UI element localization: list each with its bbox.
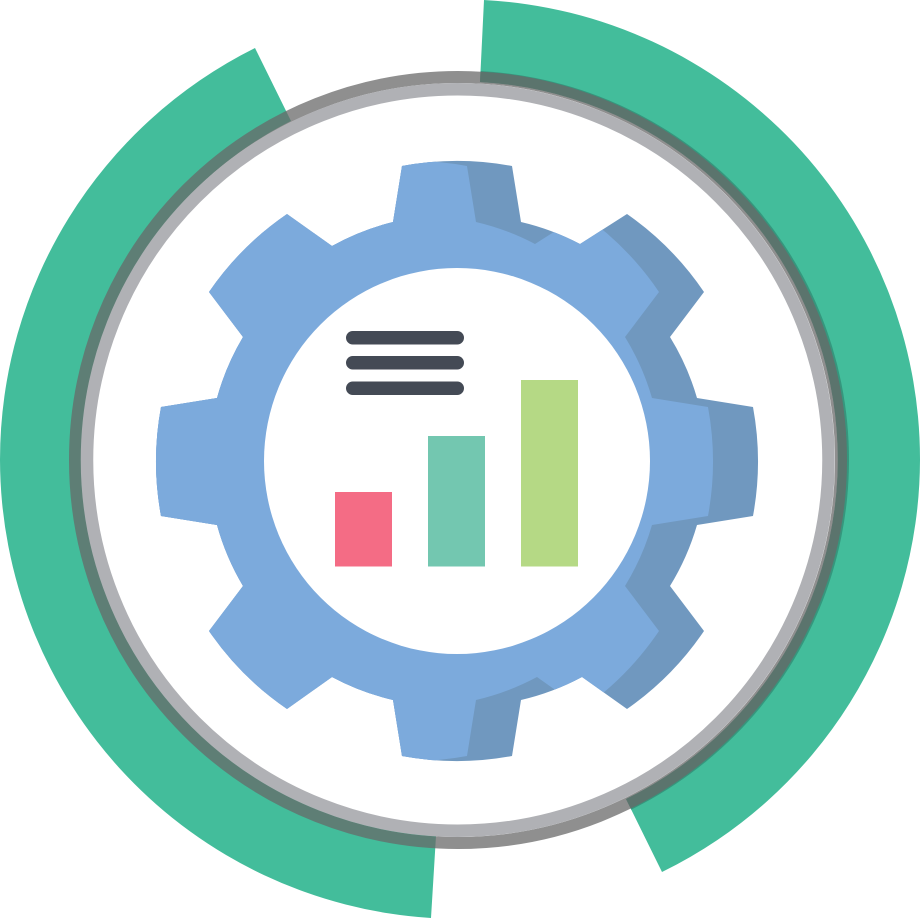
gear shadow	[156, 161, 758, 761]
bar: pink	[335, 492, 392, 566]
bar: lime	[521, 380, 578, 566]
icon: gear	[156, 160, 758, 762]
gear light face	[156, 162, 713, 760]
icon: text lines	[346, 331, 464, 395]
right green arc	[480, 0, 920, 872]
dark outer ring	[75, 77, 841, 843]
bar: teal	[428, 436, 485, 566]
left green arc	[0, 48, 436, 918]
bar chart	[335, 380, 578, 566]
gear centre hole	[264, 268, 650, 654]
light grey ring and white disc	[87, 89, 828, 831]
